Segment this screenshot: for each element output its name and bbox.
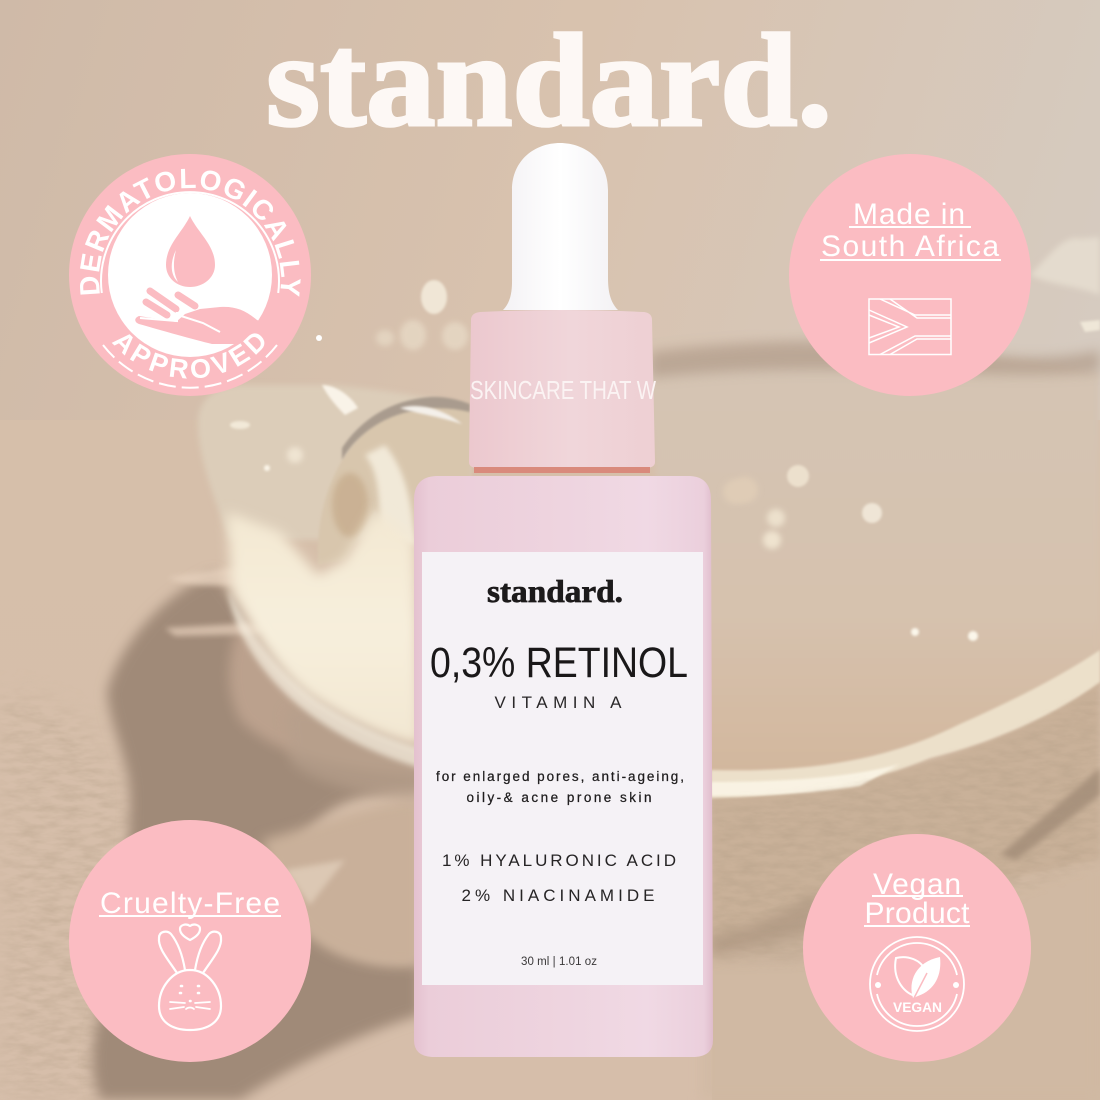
- badge: made in south africa: [789, 154, 1031, 396]
- icon: bunny with heart: [159, 925, 221, 1030]
- title: standard.: standard.: [266, 6, 832, 154]
- collar: SKINCARE THAT W: [470, 375, 656, 405]
- dropper bulb: [503, 143, 618, 310]
- curved badge text: approved: APPROVED: [112, 333, 264, 379]
- label description: oily-& acne prone skin: [466, 790, 652, 805]
- badge heading: Made in: [853, 198, 965, 231]
- bokeh highlights: [421, 280, 447, 314]
- badge: dermatologically approved: [69, 154, 311, 396]
- collar: [469, 310, 656, 473]
- badge heading: South Africa: [821, 230, 999, 263]
- badge: cruelty-free: [69, 820, 311, 1062]
- icon: vegan seal with leaves: VEGAN: [893, 999, 942, 1015]
- label subtitle: VITAMIN A: [494, 693, 622, 712]
- label actives: 2% NIACINAMIDE: [462, 886, 654, 905]
- badge heading: Vegan: [873, 868, 961, 901]
- icon: water drop: [166, 216, 215, 287]
- upper clear gel dome: [198, 385, 470, 540]
- label brand: standard.: [487, 573, 623, 609]
- label actives: [442, 851, 676, 905]
- bottle body: [414, 476, 713, 1057]
- top right gel highlight: [1030, 237, 1100, 295]
- gel cream mass: [227, 510, 420, 745]
- gel pool under cream: [262, 800, 420, 966]
- left textured ground overlay: [6, 710, 1067, 1092]
- label description: [436, 769, 684, 805]
- icon: south africa flag: [869, 299, 951, 354]
- label product name: 0,3% RETINOL: [430, 639, 688, 687]
- label actives: 1% HYALURONIC ACID: [442, 851, 676, 870]
- icon: open hand: [135, 291, 270, 350]
- glass bubble of gel: [318, 400, 470, 565]
- badge heading: Cruelty-Free: [100, 887, 280, 920]
- cast shadow: [92, 572, 420, 1100]
- label: [422, 552, 703, 985]
- icon: vegan seal with leaves: [870, 937, 964, 1031]
- right gel pool: [640, 352, 1100, 785]
- badge heading: Product: [864, 897, 970, 930]
- product: serum dropper bottle: [414, 143, 713, 1057]
- badge: vegan product: [803, 834, 1031, 1062]
- label description: for enlarged pores, anti-ageing,: [436, 769, 684, 784]
- badge heading: [820, 198, 1001, 263]
- curved badge text: dermatologically: DERMATOLOGICALLY: [80, 168, 301, 297]
- label volume: 30 ml | 1.01 oz: [521, 956, 597, 968]
- badge heading: [864, 868, 970, 930]
